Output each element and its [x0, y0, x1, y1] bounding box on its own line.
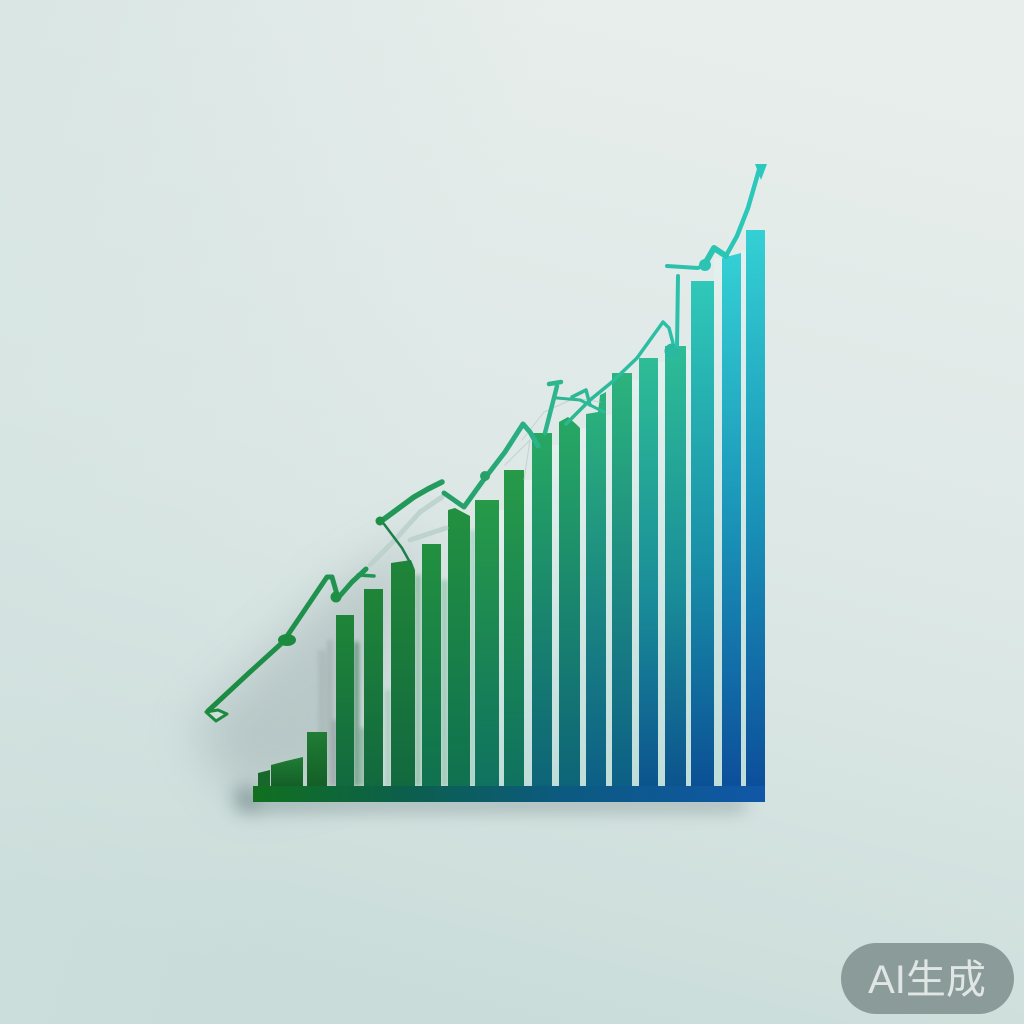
- line segment 6: [566, 322, 673, 424]
- light gaps between bars: [499, 250, 746, 786]
- bar chart: [253, 230, 765, 802]
- small bars: [258, 770, 270, 786]
- tick 1: [358, 575, 374, 576]
- node 1: [278, 634, 296, 646]
- chart shadows: [190, 530, 745, 810]
- top segment: [667, 264, 706, 268]
- line segment 3: [444, 424, 538, 507]
- tick 2: [572, 390, 590, 405]
- node 5: [664, 344, 680, 358]
- faded glass segments: [370, 398, 600, 565]
- node 3: [376, 516, 384, 526]
- arrow tail: [206, 710, 227, 721]
- ghost bars: [318, 530, 475, 786]
- rising bars: [336, 230, 765, 786]
- line segment 4: [545, 382, 561, 433]
- node 6: [699, 259, 711, 271]
- top segment 2: [706, 248, 726, 262]
- line segment 5: [557, 398, 604, 412]
- arrow head: [755, 164, 767, 180]
- trend line: [206, 164, 767, 721]
- badge: AI生成: AI生成: [868, 958, 986, 1002]
- badge: AI生成: [841, 943, 1014, 1014]
- line segment 2: [380, 482, 442, 522]
- node 2: [330, 592, 342, 602]
- line segment 1: [208, 569, 366, 711]
- node 4: [480, 471, 490, 481]
- upright stem: [677, 276, 678, 346]
- arrow head line: [727, 170, 759, 254]
- thin curve: [384, 524, 412, 566]
- base: [253, 786, 765, 802]
